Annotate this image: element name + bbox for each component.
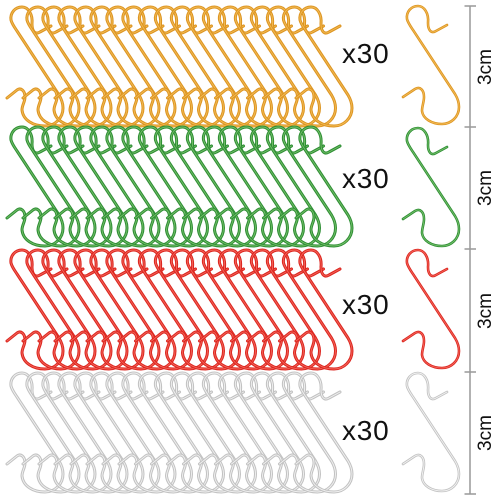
dimension label 3: 3cm: [475, 293, 496, 329]
single green hook: [403, 128, 459, 246]
quantity label green: x30: [342, 163, 390, 194]
single red hook: [403, 250, 459, 368]
dimension label 2: 3cm: [475, 170, 496, 206]
dimension label 1: 3cm: [475, 49, 496, 85]
red hooks stack: [7, 250, 352, 369]
single gold hook: [403, 6, 459, 124]
silver hooks stack: [7, 373, 352, 492]
dimension label 4: 3cm: [475, 415, 496, 451]
green hooks stack: [7, 127, 352, 246]
single silver hook: [403, 373, 459, 491]
gold hooks stack: [7, 7, 352, 126]
quantity label red: x30: [342, 289, 390, 320]
quantity label gold: x30: [342, 38, 390, 69]
scale bar: [464, 6, 476, 494]
quantity label silver: x30: [342, 415, 390, 446]
